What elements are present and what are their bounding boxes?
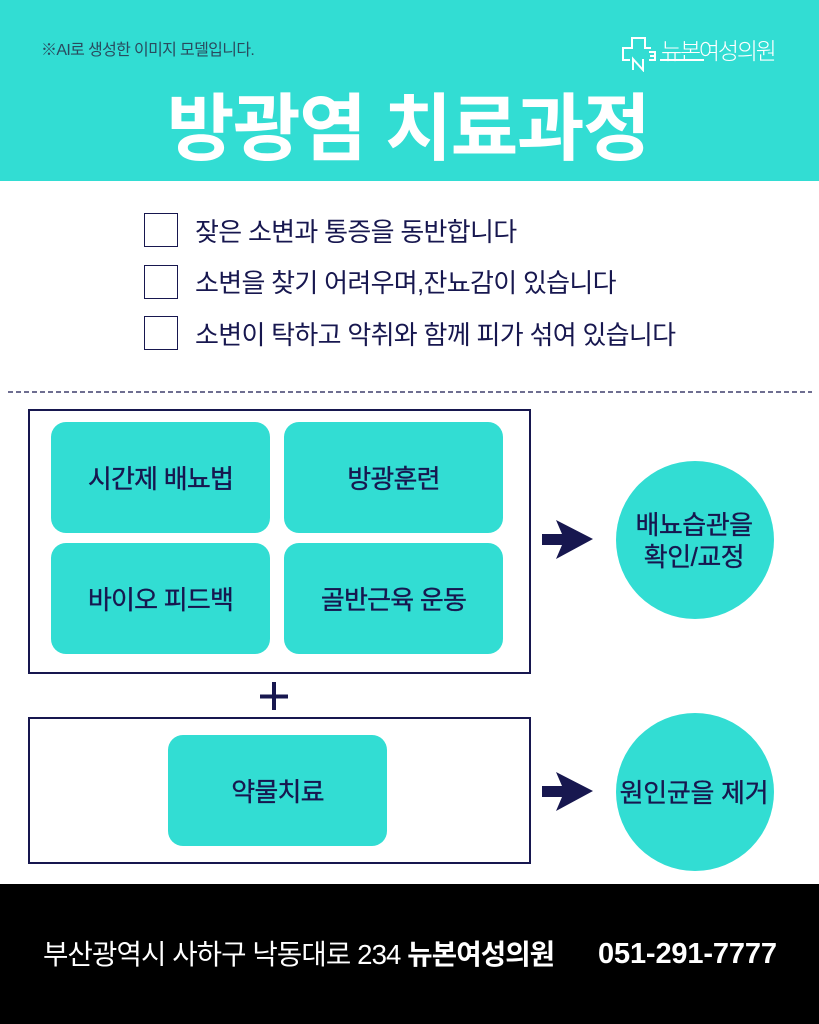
- card: bladder training: [284, 422, 503, 533]
- header band: [0, 0, 819, 181]
- footer band: [0, 884, 819, 1024]
- checkbox 2: [144, 265, 178, 299]
- plus sign: [260, 682, 288, 710]
- card: pelvic floor exercise: 골반근육 운동: [321, 585, 466, 615]
- card: timed voiding: [51, 422, 270, 533]
- circle: check habits: 확인/교정: [644, 542, 744, 572]
- circle: remove bacteria: [616, 713, 774, 871]
- circle: check habits: 배뇨습관을: [635, 510, 753, 540]
- card: biofeedback: [51, 543, 270, 654]
- symptom 1: 잦은 소변과 통증을 동반합니다: [195, 217, 516, 247]
- arrow 1: [542, 520, 593, 559]
- logo underline: [660, 59, 704, 61]
- arrow 2: [542, 772, 593, 811]
- circle: check habits: [616, 461, 774, 619]
- card: timed voiding: 시간제 배뇨법: [88, 464, 233, 494]
- disclaimer note: ※AI로 생성한 이미지 모델입니다.: [41, 42, 254, 59]
- panel: behavioural therapies: [28, 409, 531, 674]
- card: pelvic floor exercise: [284, 543, 503, 654]
- checkbox 1: [144, 213, 178, 247]
- phone: 051-291-7777: [598, 938, 777, 970]
- checklist: [144, 213, 676, 350]
- panel: medication: [28, 717, 531, 864]
- logo text: 뉴본여성의원: [661, 38, 775, 64]
- card: bladder training: 방광훈련: [347, 464, 440, 494]
- card: biofeedback: 바이오 피드백: [88, 585, 233, 615]
- checkbox 3: [144, 316, 178, 350]
- card: medication: 약물치료: [231, 777, 324, 807]
- address: 부산광역시 사하구 낙동대로 234 뉴본여성의원: [43, 939, 554, 970]
- symptom 3: 소변이 탁하고 악취와 함께 피가 섞여 있습니다: [195, 320, 675, 350]
- circle: remove bacteria: 원인균을 제거: [620, 778, 768, 808]
- logo: [622, 37, 775, 72]
- symptom 2: 소변을 찾기 어려우며,잔뇨감이 있습니다: [195, 268, 616, 298]
- card: medication: [168, 735, 387, 846]
- title: 방광염 치료과정: [167, 87, 649, 170]
- icon: logo cross: [622, 37, 656, 72]
